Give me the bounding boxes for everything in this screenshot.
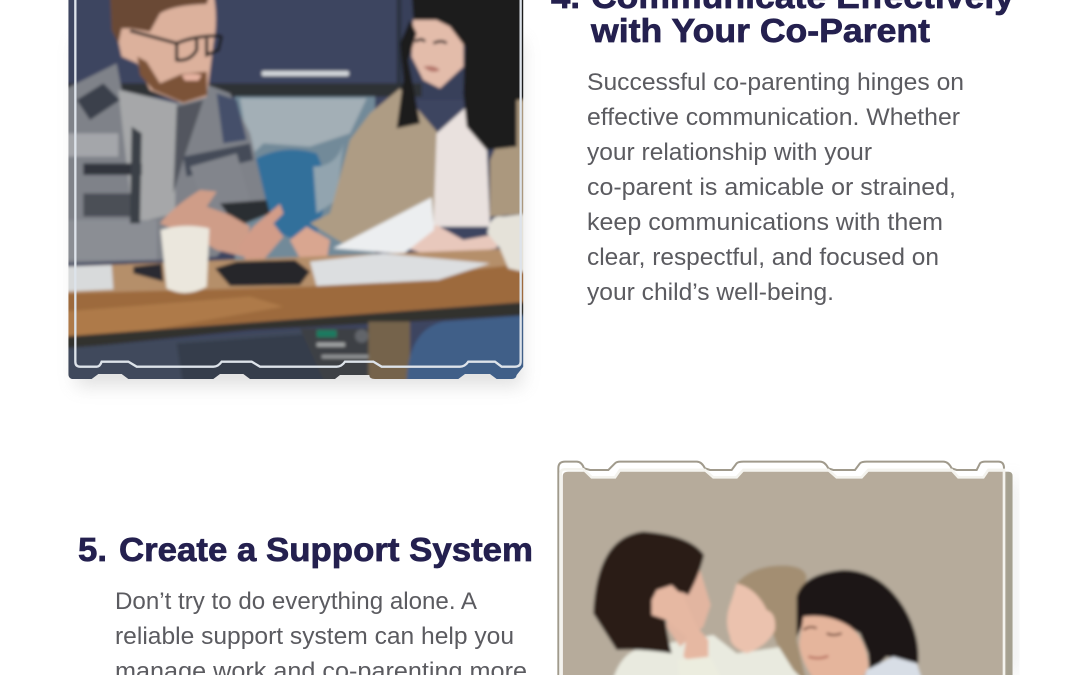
photo: couple reviewing papers at a table: [63, 0, 530, 387]
step 4 body text: your relationship with your: [587, 139, 872, 166]
step 5 heading: 5.: [78, 531, 107, 568]
step 4 body text: clear, respectful, and focused on: [587, 244, 939, 271]
step 5 body text: [115, 588, 527, 675]
step 4 body text: co-parent is amicable or strained,: [587, 174, 956, 201]
step 4 body text: effective communication. Whether: [587, 104, 960, 131]
step 4 heading: with Your Co-Parent: [590, 12, 930, 49]
step 4 heading: [551, 0, 1015, 49]
photo outline: [558, 462, 1004, 675]
step 5 body text: Don’t try to do everything alone. A: [115, 588, 477, 615]
step 4 body text: [587, 69, 964, 306]
step 4 body text: your child’s well-being.: [587, 279, 834, 306]
step 5 body text: reliable support system can help you: [115, 623, 514, 650]
step 4 body text: Successful co-parenting hinges on: [587, 69, 964, 96]
photo outline: [75, 0, 521, 367]
step 4 body text: keep communications with them: [587, 209, 943, 236]
photo: mother, child and grandmother hugging: [557, 462, 1020, 675]
step 5 heading: Create a Support System: [119, 531, 533, 568]
